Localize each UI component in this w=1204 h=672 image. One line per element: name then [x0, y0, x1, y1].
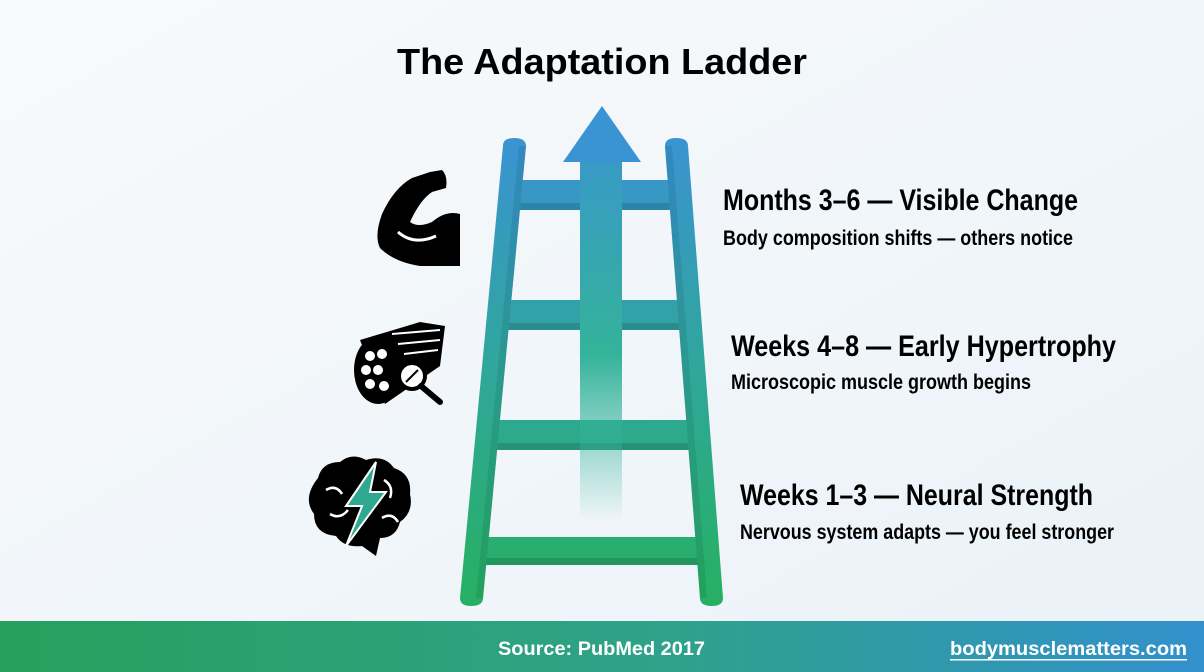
text block: weeks 4-8 [731, 330, 1116, 394]
ladder [460, 138, 723, 606]
icon: brain with lightning [309, 456, 411, 556]
rungs [472, 180, 712, 565]
text block: months 3-6: Months 3–6 — Visible Change [723, 184, 1078, 217]
footer bar [0, 621, 1204, 672]
text block: weeks 4-8: Microscopic muscle growth begins [731, 371, 1031, 394]
icon: flexed arm [377, 170, 460, 266]
text block: months 3-6: Body composition shifts — others notice [723, 227, 1073, 250]
text block: weeks 1-3 [740, 479, 1114, 544]
website link: bodymusclematters.com [950, 639, 1187, 660]
text block: weeks 1-3: Nervous system adapts — you feel stronger [740, 521, 1114, 544]
text block: weeks 4-8: Weeks 4–8 — Early Hypertrophy [731, 330, 1116, 363]
title: The Adaptation Ladder [397, 41, 807, 82]
left rail [460, 138, 526, 606]
source text: Source: PubMed 2017 [498, 639, 705, 660]
text block: weeks 1-3: Weeks 1–3 — Neural Strength [740, 479, 1093, 512]
arrow [563, 106, 641, 520]
icon: muscle fiber with magnifier [354, 322, 445, 404]
text block: months 3-6 [723, 184, 1078, 250]
right rail [665, 138, 723, 606]
